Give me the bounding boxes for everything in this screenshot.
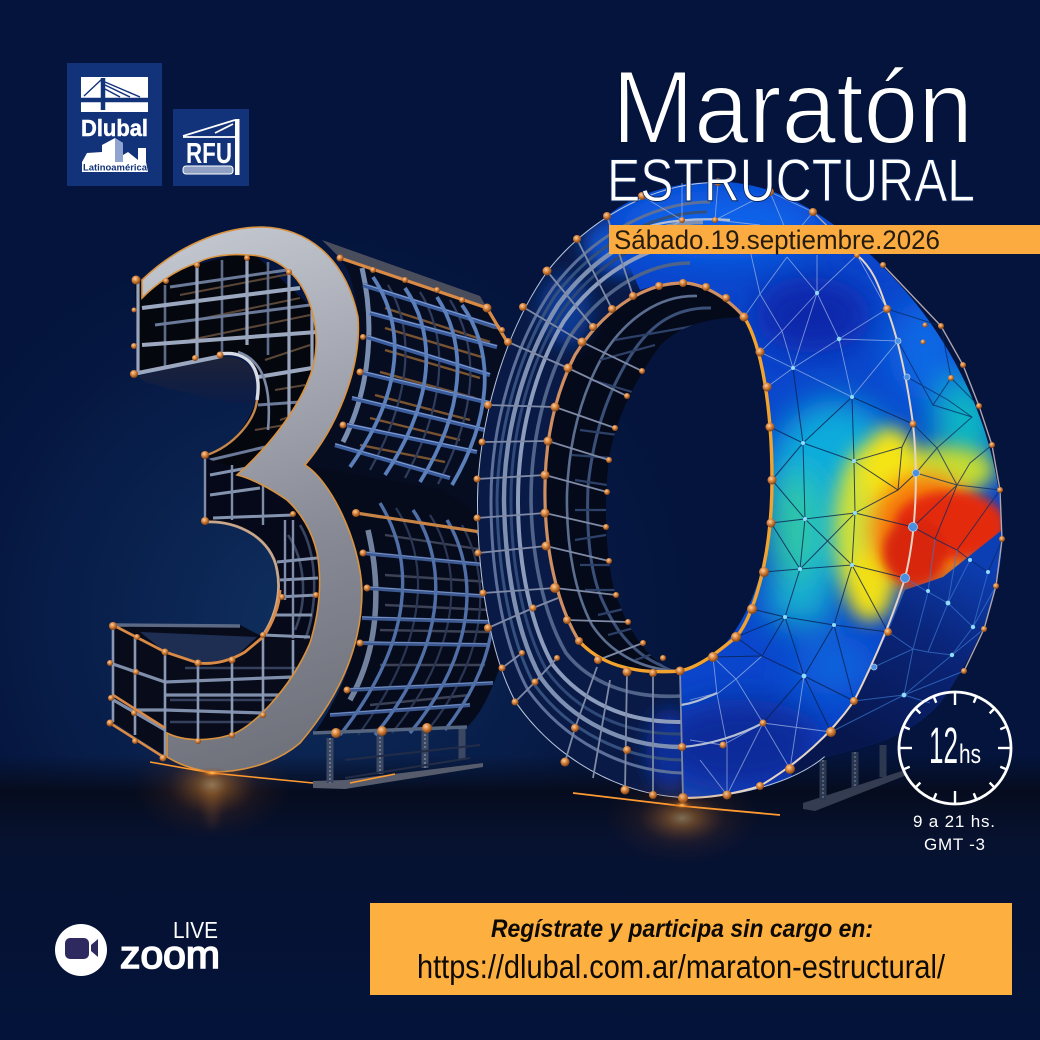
digit 0 <box>474 170 1012 863</box>
copper nodes of 3 <box>106 254 505 762</box>
upper barrel cage <box>305 258 506 525</box>
schedule text <box>913 812 995 854</box>
large blue seam nodes <box>871 338 920 670</box>
logo: Zoom live <box>55 917 220 977</box>
FEM node dots <box>783 291 990 697</box>
registration banner: Regístrate y participa sin cargo en: <box>491 915 873 943</box>
dark lower side wall <box>791 530 1002 777</box>
logo: Zoom live: LIVE <box>173 917 218 943</box>
registration banner <box>370 903 1012 995</box>
lower middle cage <box>205 458 325 640</box>
inner tube wall, dark mesh <box>540 215 743 792</box>
support legs of 0 <box>803 745 907 811</box>
clock ticks <box>899 692 1011 804</box>
orange inner edge <box>545 283 772 672</box>
lower front cage <box>110 590 320 758</box>
title <box>607 50 975 214</box>
schedule text: GMT -3 <box>924 835 985 854</box>
upper front cage <box>135 250 325 480</box>
logo: Dlubal Latinoamérica: Latinoamérica <box>83 162 148 174</box>
ring wire base <box>477 182 1002 798</box>
schedule text: 9 a 21 hs. <box>913 812 995 831</box>
support legs of 3 <box>313 728 483 789</box>
clock: 12 hs: 12 <box>929 717 958 774</box>
ring nodes <box>474 178 1005 803</box>
logo: RFU <box>173 109 249 186</box>
silver face of 3 <box>142 227 362 772</box>
ring hoops <box>477 182 825 798</box>
lower barrel cage <box>305 465 505 735</box>
title line: ESTRUCTURAL: ESTRUCTURAL <box>607 147 975 214</box>
logo: Zoom live: zoom <box>120 934 220 977</box>
digit 3 <box>106 227 506 840</box>
clock: 12 hs: hs <box>959 739 981 769</box>
date bar: Sábado.19.septiembre.2026 <box>614 225 940 255</box>
floor glow under 0 <box>573 773 780 863</box>
title line: Maratón: Maratón <box>612 50 973 166</box>
logo: RFU: RFU <box>186 138 232 170</box>
logo: Dlubal Latinoamérica: Dlubal <box>81 115 148 141</box>
orange floor line under 3 <box>150 762 395 783</box>
logo: Dlubal Latinoamérica <box>67 63 162 186</box>
FEM stress colour surface <box>600 170 1012 810</box>
ring radial rods <box>477 216 683 798</box>
registration banner: https://dlubal.com.ar/maraton-estructural/ <box>417 948 946 985</box>
hot spot under 3 <box>196 767 228 779</box>
clock: 12 hs <box>899 692 1011 804</box>
floor glow under 3 <box>132 730 292 840</box>
FEM mesh lines <box>642 182 1002 798</box>
top slab of 3 <box>322 240 487 308</box>
